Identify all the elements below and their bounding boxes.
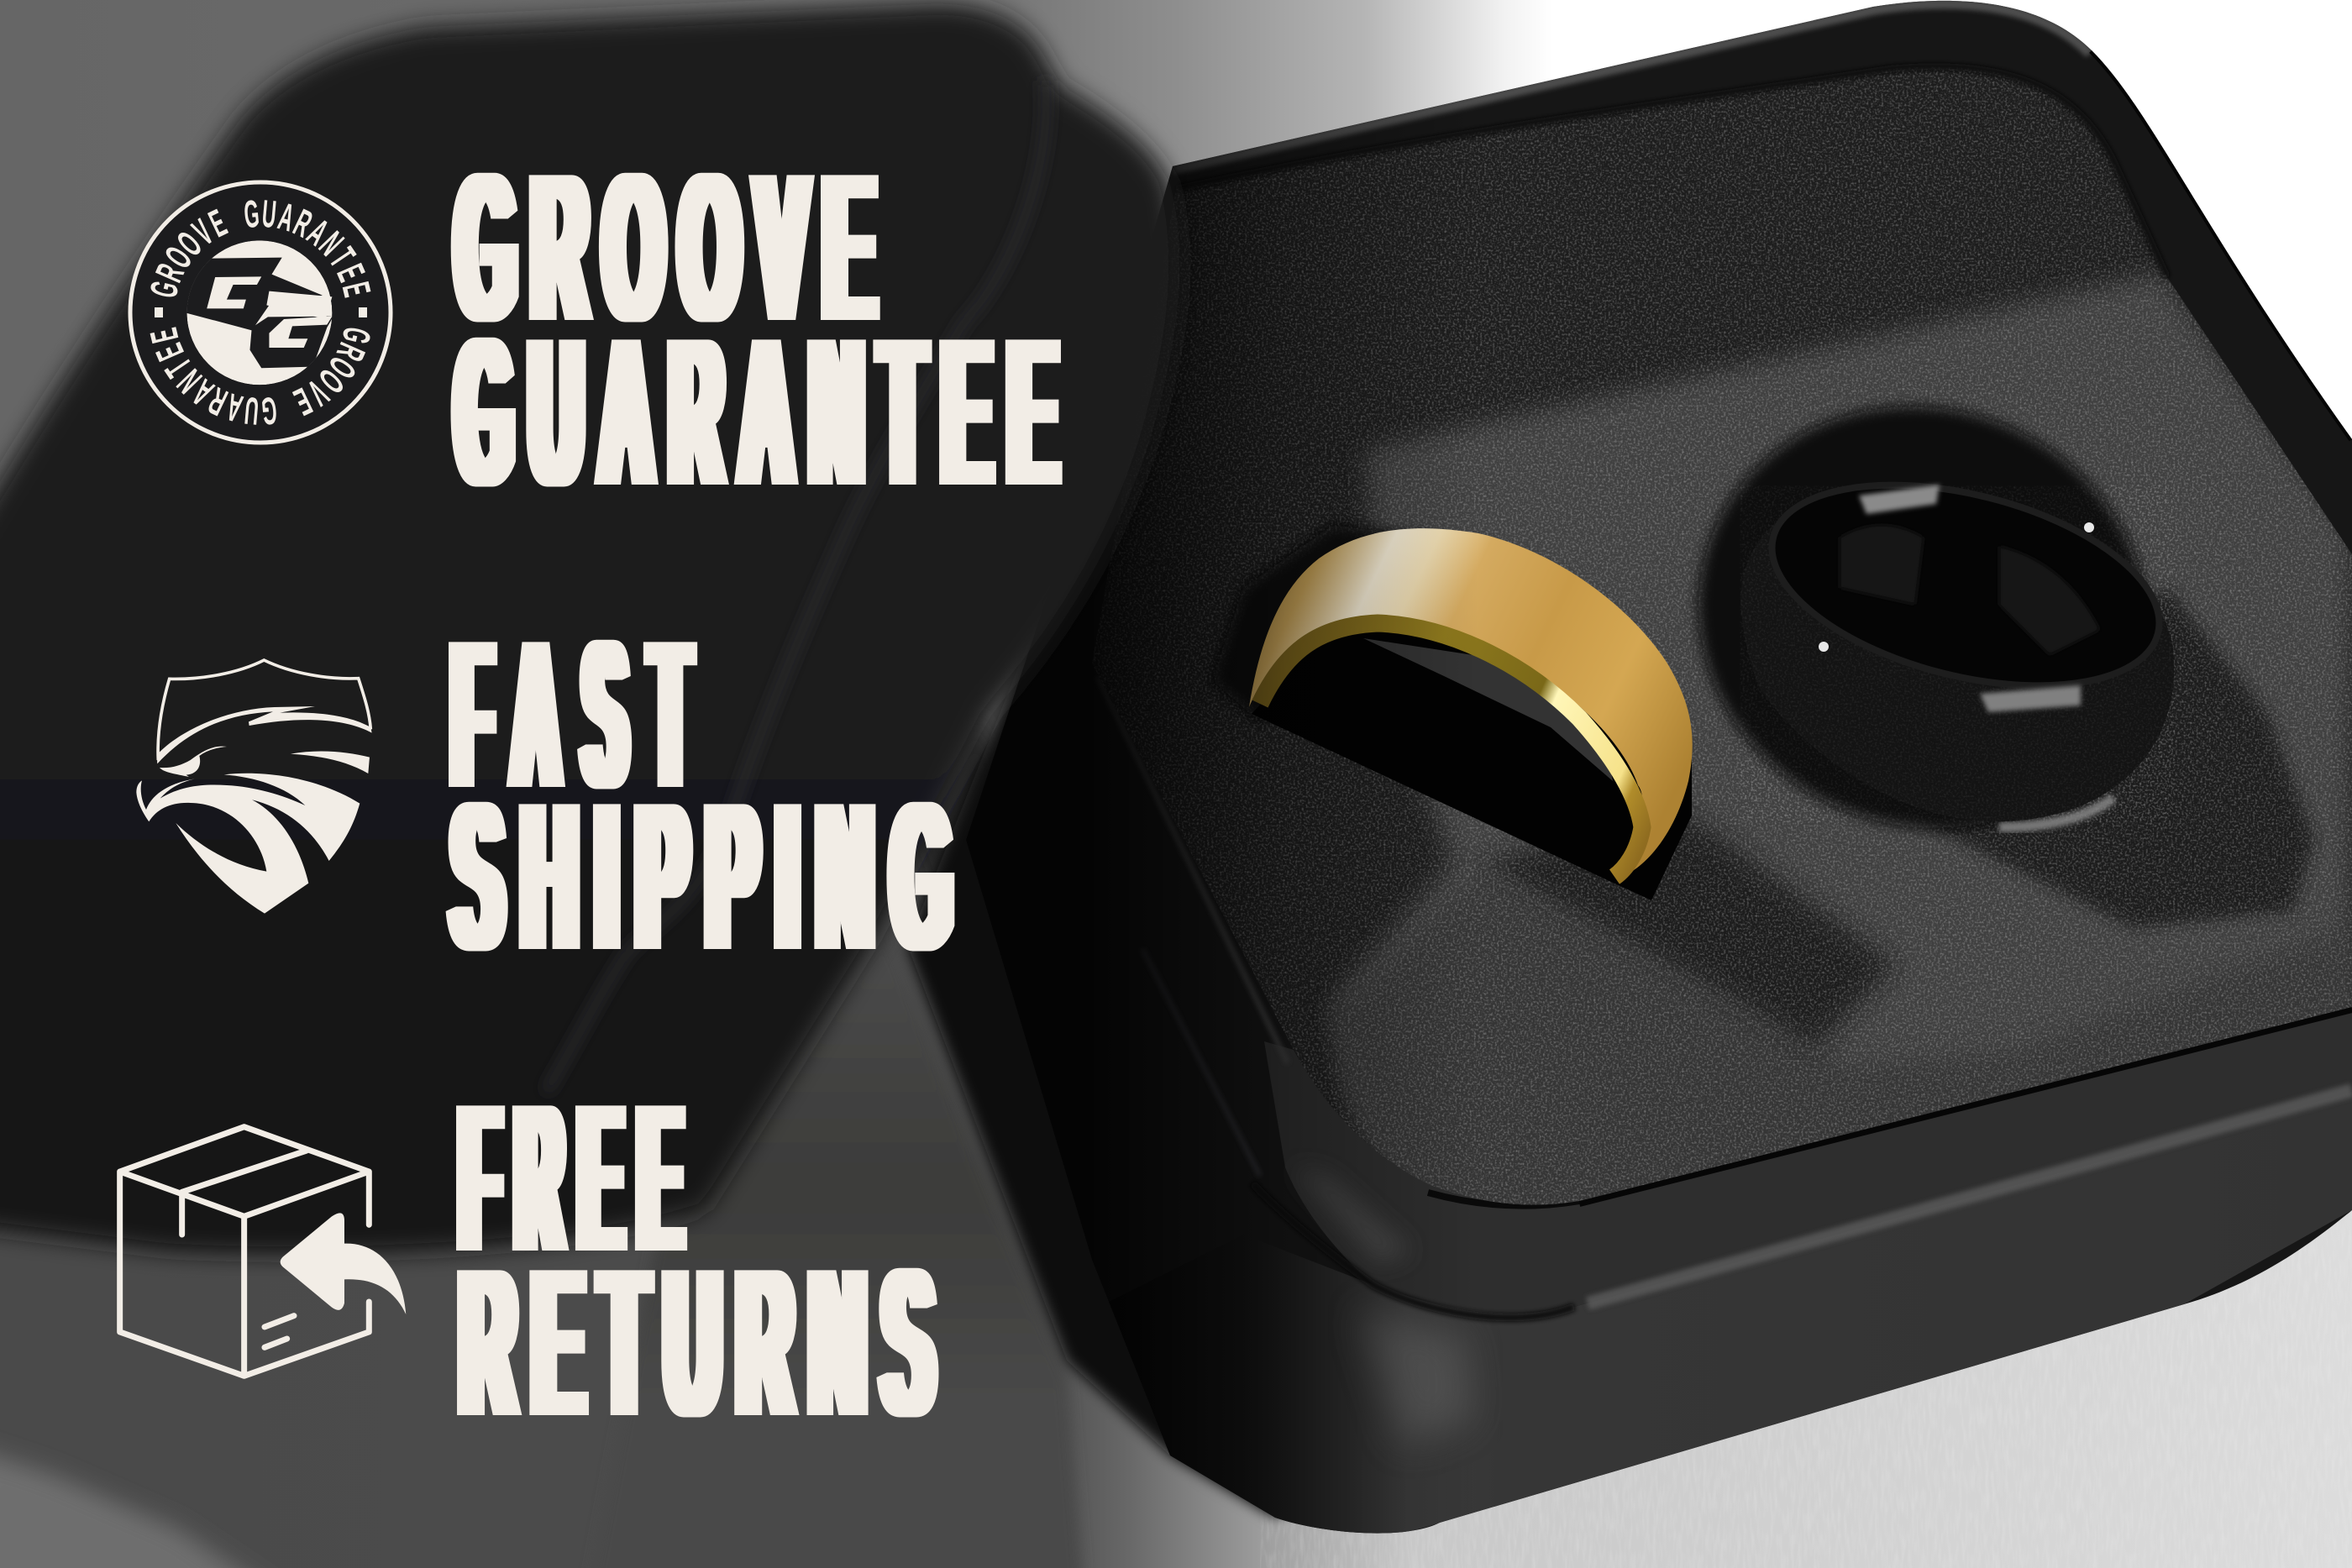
dark left wall of the ring box [907,504,1428,1518]
foam speckle [1092,50,2352,1226]
badge circular text: O [320,349,365,386]
box rim front [1264,1007,2352,1314]
badge circular text: E [147,338,192,367]
box shell [1090,0,2352,1534]
badge circular text: E [202,201,233,245]
heading: fast shipping [452,597,951,994]
badge circular text: E [328,258,374,287]
lit foam area [1333,273,2352,1215]
badge circular text: G [260,389,279,433]
badge circular text: G [242,191,261,236]
badge circular text: A [274,194,299,240]
heading: groove guarantee: GUARANTEE [456,293,1057,530]
badge circular text: G [333,323,380,348]
heading: free returns: RETURNS [460,1224,933,1460]
badge circular text: N [169,361,210,401]
badge circular text: R [147,258,192,288]
badge circular text: G [141,277,187,302]
slot shadow beside gold ring [1212,525,1428,722]
badge circular text: O [156,239,201,275]
badge circular text: E [141,324,186,347]
badge circular text: R [202,379,234,424]
box top edge highlight [1173,4,2090,170]
foam insert [1092,50,2352,1226]
lid edge highlight [546,81,1046,1092]
badge circular text: A [300,210,337,254]
badge circular text: V [300,371,336,414]
badge circular text: O [311,361,352,401]
badge circular text: U [243,389,260,433]
badge circular text: A [184,371,221,415]
ring body [1740,486,2174,821]
badge circular text: T [321,240,364,275]
heading: free returns: FREE [460,1061,681,1296]
icon: groove guarantee badge [130,182,391,443]
icon: eagle shield [136,660,372,914]
blurred box lid in foreground [0,3,1179,1254]
badge circular text: A [222,385,247,431]
left fade over box [924,0,1512,1568]
foam seen through gold ring [1363,638,1613,781]
heading: groove guarantee [456,128,1057,530]
badge circular text: E [288,380,318,424]
heading: fast shipping: FAST [453,597,690,832]
heading: free returns [460,1061,933,1460]
gold ring [1249,528,1693,878]
black ring [1740,449,2180,827]
ring box photo [924,0,2352,1568]
ring foot [1999,798,2113,827]
badge circular text: V [185,211,221,254]
icon: return box [120,1127,406,1376]
ring cast shadows [1478,814,1896,1050]
socket shadow for black ring [1639,344,2208,890]
heading: groove guarantee: GROOVE [456,128,874,364]
badge GG monogram [178,240,333,385]
badge circular text: N [311,223,352,264]
gold band [1249,528,1693,878]
badge circular text: O [169,223,210,264]
gold ring bevel [1260,623,1642,877]
badge circular text: E [334,278,380,301]
badge circular text: R [287,201,318,246]
badge circular text: R [328,337,374,367]
box front body [1092,1092,2352,1535]
badge circular text [141,191,380,433]
badge circular text: T [157,350,200,385]
badge circular text: U [260,191,278,236]
heading: fast shipping: SHIPPING [452,758,951,994]
ring opening [1751,449,2180,721]
